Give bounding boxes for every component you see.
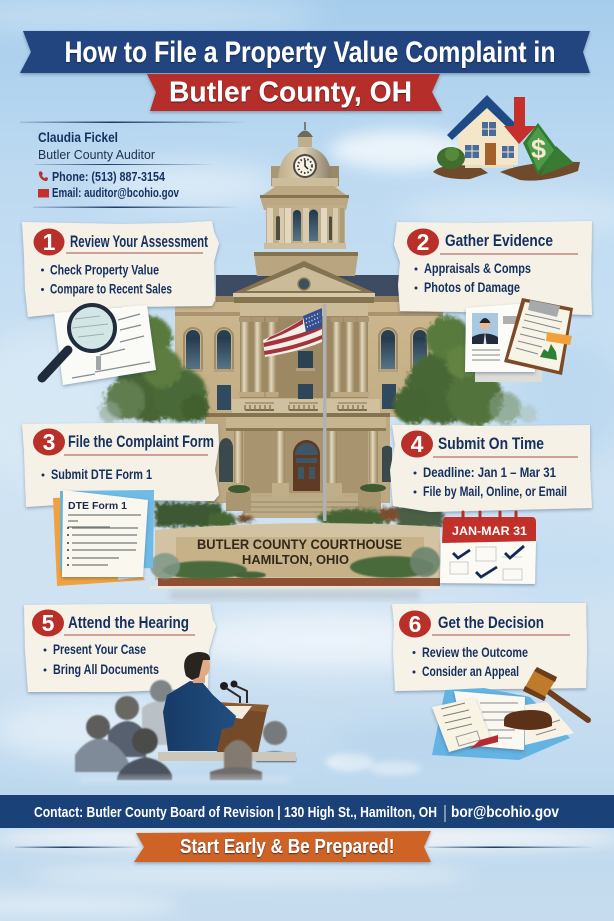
contact footer bar	[0, 795, 614, 828]
call to action banner	[15, 831, 593, 862]
badge 2: 2	[417, 229, 429, 255]
step 1 list: Compare to Recent Sales	[50, 282, 172, 296]
mist fade	[80, 776, 290, 783]
badge 6	[399, 610, 431, 638]
dome and tower	[254, 122, 358, 276]
auditor contact block	[20, 122, 248, 208]
step 5 list: Bring All Documents	[53, 662, 159, 677]
tree left	[99, 316, 209, 423]
step 4 list: File by Mail, Online, or Email	[423, 484, 567, 499]
audience	[75, 680, 296, 780]
panel: step 6 get the decision	[392, 603, 587, 691]
step 2 list: Photos of Damage	[424, 280, 520, 295]
courthouse illustration	[99, 122, 537, 600]
footer contact text: Contact: Butler County Board of Revision | 130 High St., Hamilton, OH	[34, 804, 437, 821]
icon: evidence photo and clipboard	[465, 298, 573, 382]
step 5 heading: Attend the Hearing	[68, 613, 189, 632]
step 5 list	[44, 642, 159, 677]
bench	[158, 752, 296, 761]
badge 4: 4	[411, 431, 424, 457]
upper windows	[183, 328, 430, 410]
footer email: bor@bcohio.gov	[451, 804, 559, 821]
pediment	[233, 261, 375, 320]
panel: step 5 attend the hearing	[24, 604, 216, 692]
icon: gavel and documents	[432, 667, 588, 760]
badge 4	[401, 430, 433, 458]
subtitle text: Butler County, OH	[169, 76, 412, 108]
panel: step 4 submit on time	[390, 425, 592, 512]
icon: email	[38, 189, 49, 198]
badge 3	[33, 428, 65, 456]
phone number: Phone: (513) 887-3154	[52, 169, 166, 184]
tree right	[393, 316, 537, 426]
badge 5	[32, 610, 64, 636]
step 2 heading: Gather Evidence	[445, 231, 553, 250]
email address: Email: auditor@bcohio.gov	[52, 185, 180, 200]
badge 1: 1	[43, 229, 56, 255]
step 1 list	[41, 262, 172, 296]
icon: house with falling value and money	[433, 95, 580, 181]
roof	[216, 275, 399, 298]
step 6 list: Consider an Appeal	[422, 664, 519, 679]
sign text: BUTLER COUNTY COURTHOUSE	[197, 536, 402, 552]
call to action text: Start Early & Be Prepared!	[180, 836, 394, 858]
stone courthouse sign	[150, 523, 440, 589]
step 6 list	[412, 645, 528, 679]
step 4 list	[414, 465, 567, 499]
badge 3: 3	[43, 429, 55, 455]
main building wall	[175, 297, 443, 417]
badge 1	[34, 228, 64, 256]
hearing scene with speaker and audience	[75, 652, 296, 783]
speaker	[163, 652, 269, 752]
auditor title: Butler County Auditor	[38, 148, 155, 162]
icon: magnifying glass over document	[42, 305, 156, 385]
panel: step 2 gather evidence	[394, 221, 592, 315]
icon: DTE form stack	[53, 490, 154, 586]
icon: phone	[39, 171, 48, 181]
flag pole and flag	[263, 304, 326, 521]
step 4 list: Deadline: Jan 1 – Mar 31	[423, 465, 556, 480]
step 1 list: Check Property Value	[50, 262, 159, 278]
front audience head	[210, 740, 262, 780]
portico recess	[240, 320, 368, 398]
icon: house with falling value and money: $	[531, 134, 546, 164]
clock	[293, 154, 317, 178]
step 5 list: Present Your Case	[53, 642, 146, 657]
step 6 list: Review the Outcome	[422, 645, 528, 660]
step 2 list: Appraisals & Comps	[424, 261, 531, 276]
badge 6: 6	[409, 611, 421, 637]
step 3 list: Submit DTE Form 1	[51, 467, 152, 482]
shrubs behind sign	[155, 503, 443, 528]
icon: calendar	[440, 512, 536, 584]
sign text: HAMILTON, OHIO	[242, 552, 349, 567]
calendar label: JAN-MAR 31	[452, 524, 527, 538]
columns	[238, 317, 370, 397]
step 3 heading: File the Complaint Form	[68, 432, 214, 451]
balcony	[232, 399, 380, 413]
ground floor	[176, 413, 392, 518]
sign text	[197, 536, 402, 567]
panel: step 1 review your assessment	[22, 221, 219, 317]
form label: DTE Form 1	[68, 500, 127, 512]
panel: step 3 file the complaint form	[22, 423, 219, 507]
auditor name: Claudia Fickel	[38, 129, 118, 145]
subtitle banner	[147, 74, 442, 111]
badge 5: 5	[42, 610, 55, 636]
title banner	[20, 31, 590, 73]
mist under sign	[170, 590, 420, 600]
step 4 heading: Submit On Time	[438, 434, 544, 453]
step 6 heading: Get the Decision	[438, 613, 544, 632]
badge 2	[407, 228, 439, 256]
step 1 heading: Review Your Assessment	[70, 232, 208, 251]
step 2 list	[414, 261, 531, 295]
